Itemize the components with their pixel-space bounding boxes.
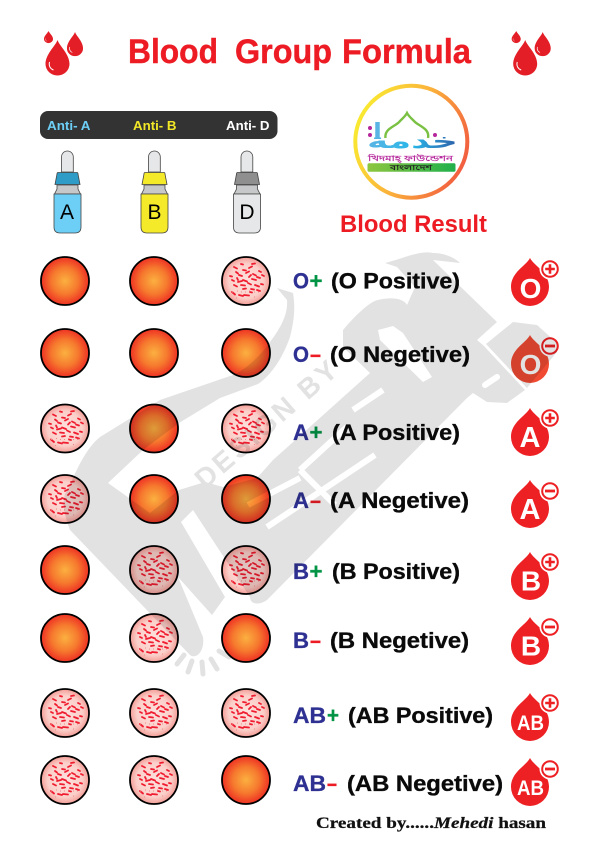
icon: reagent bottle D [234,151,260,233]
title: Formula [342,33,472,71]
label: – [310,628,321,653]
row: B positive [41,546,560,600]
title: Blood [128,33,218,71]
icon: blood type B- [511,616,560,665]
test B: no clumping [130,257,178,305]
icon: blood type AB+ [511,692,560,741]
label: A [293,488,309,513]
label: O [293,342,309,367]
icon: blood drops right [512,31,551,76]
row: AB negative [41,756,560,806]
test A: clumping [41,475,89,523]
label: O [293,268,309,294]
test A: clumping [41,689,89,737]
icon: reagent bottle D: D [239,201,255,224]
icon: blood type B+ [511,552,560,600]
test D: no clumping [222,329,270,377]
label: – [327,771,337,796]
row: O positive [41,257,560,306]
icon: blood type B+: B [521,566,541,596]
row: A positive [41,404,560,456]
test D: no clumping [222,756,270,804]
watermark: Mehedi logo [64,252,557,674]
row: O negative [41,329,560,383]
icon: blood type AB-: AB [517,777,544,800]
icon: reagent bottle B [141,151,168,233]
test D: clumping [222,257,270,305]
label: (O Positive) [331,268,460,294]
test A: clumping [41,404,89,452]
icon: blood type A- [511,480,560,528]
label: + [310,268,322,294]
test D: clumping [222,404,270,452]
test B: no clumping [130,404,178,452]
test D: no clumping [222,614,270,662]
row: AB positive [41,689,560,741]
label: (B Positive) [332,559,460,584]
test B: clumping [130,689,178,737]
icon: blood drops left [44,31,83,76]
label: + [310,559,322,584]
test B: clumping [130,756,178,804]
label: A [293,420,309,445]
test D: clumping [222,546,270,594]
label: AB [293,771,326,796]
test A: no clumping [41,546,89,594]
test B: no clumping [130,329,178,377]
logo: Khidmah Foundation Bangladesh [355,86,467,198]
label: Anti-B: Anti- B [133,119,176,133]
title [128,33,472,71]
test B: clumping [130,546,178,594]
test D: clumping [222,689,270,737]
logo: Khidmah Foundation Bangladesh: خدمة [367,129,458,153]
icon: blood type B-: B [521,630,541,662]
row: A negative [41,475,560,528]
label: + [310,420,322,445]
test D: no clumping [222,475,270,523]
watermark: fan ornament [177,651,229,674]
label: Anti-D: Anti- D [226,119,270,133]
credit line: Created by...... Mehedi hasan [316,815,546,832]
label: B [293,559,309,584]
label: (AB Negetive) [347,771,503,796]
icon: reagent bottle A [54,151,81,233]
label [293,703,493,728]
logo: Khidmah Foundation Bangladesh: বাংলাদেশ [388,164,433,172]
watermark text: DESIGN BY: DESIGN BY [189,354,344,495]
label: Anti-A: Anti- A [47,119,90,133]
icon: blood type O+: O [520,273,541,304]
test A: no clumping [41,329,89,377]
label: – [310,342,321,367]
label: – [310,488,321,513]
test B: no clumping [130,475,178,523]
label [293,771,503,796]
icon: blood type AB+: AB [517,712,544,735]
label: (O Negetive) [330,342,470,367]
icon: blood type A+ [511,408,560,456]
label: + [327,703,339,728]
row: B negative [41,614,560,665]
icon: blood type AB- [511,758,560,806]
icon: blood type O-: O [520,349,541,380]
test A: no clumping [41,257,89,305]
icon: blood type A-: A [520,494,541,526]
label: (A Negetive) [330,488,469,513]
heading: Blood Result: Blood Result [340,211,487,238]
test A: no clumping [41,614,89,662]
icon: blood type O+ [511,258,560,306]
test B: clumping [130,614,178,662]
label: (A Positive) [332,420,460,445]
icon: blood type O- [511,335,560,383]
label: (B Negetive) [330,628,469,653]
test A: clumping [41,756,89,804]
label: B [293,628,309,653]
icon: reagent bottle B: B [147,201,162,224]
label: AB [293,703,326,728]
panel: antibody label bar [40,111,278,139]
logo: Khidmah Foundation Bangladesh: খিদমাহ্ ফাউন্ডেশন [366,152,455,164]
icon: blood type A+: A [520,422,541,454]
title: Group [235,33,332,71]
icon: reagent bottle A: A [60,201,74,224]
label: (AB Positive) [348,703,493,728]
